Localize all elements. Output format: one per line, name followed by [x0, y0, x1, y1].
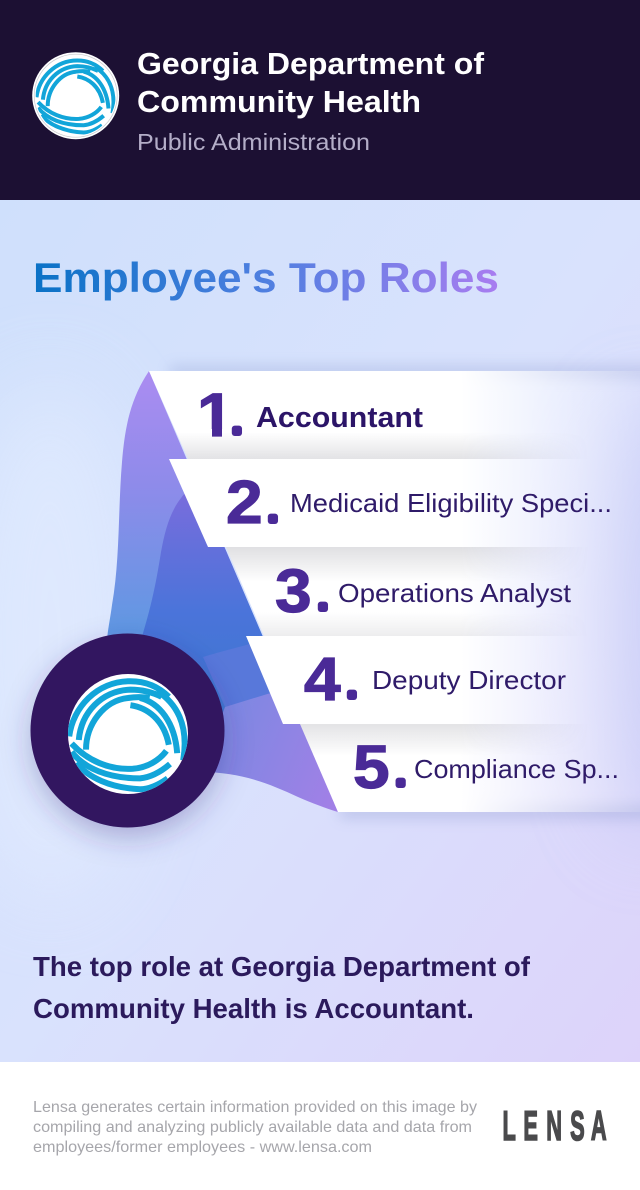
- footer panel: [0, 1062, 640, 1190]
- disclaimer text: compiling and analyzing publicly available data and data from: [33, 1119, 472, 1136]
- summary text: [33, 951, 531, 1024]
- title: Employee's Top Roles: [33, 254, 499, 301]
- rank 5: 5: [353, 734, 390, 801]
- industry: Public Administration: [137, 129, 370, 155]
- disclaimer text: [33, 1099, 477, 1156]
- disclaimer text: employees/former employees - www.lensa.com: [33, 1139, 372, 1156]
- disclaimer text: Lensa generates certain information provided on this image by: [33, 1099, 477, 1116]
- role name 3: Operations Analyst: [338, 578, 572, 608]
- role name 5: Compliance Sp...: [414, 754, 619, 784]
- role row 5: [300, 724, 640, 812]
- rank 3: .: [319, 583, 327, 616]
- company name: Georgia Department of: [137, 46, 485, 81]
- header panel: [0, 0, 640, 200]
- rank 1: 1: [197, 382, 234, 449]
- role name 4: Deputy Director: [372, 665, 566, 695]
- rank 2: 2: [226, 469, 263, 536]
- icon: company logo small: [32, 52, 119, 139]
- rank 1: .: [233, 407, 241, 440]
- company name: Community Health: [137, 84, 421, 119]
- background panel: [0, 200, 640, 1062]
- funnel graphic: [107, 371, 338, 812]
- role name 2: Medicaid Eligibility Speci...: [290, 488, 612, 518]
- role row 2: [169, 459, 640, 547]
- summary text: The top role at Georgia Department of: [33, 951, 531, 982]
- role name 1: Accountant: [256, 402, 423, 434]
- summary text: Community Health is Accountant.: [33, 993, 474, 1024]
- rank 1: [200, 393, 242, 437]
- rank 5: .: [396, 759, 405, 792]
- company name: [137, 46, 485, 119]
- rank 4: 4: [304, 646, 341, 713]
- role row 1: [149, 371, 640, 459]
- icon: company logo large: [30, 634, 224, 828]
- rank 4: .: [348, 671, 356, 704]
- rank 2: .: [269, 495, 277, 528]
- role row 3: [226, 547, 640, 636]
- rank 3: 3: [275, 558, 312, 625]
- role row 4: [246, 636, 640, 724]
- Lensa logo: LENSA: [503, 1104, 607, 1150]
